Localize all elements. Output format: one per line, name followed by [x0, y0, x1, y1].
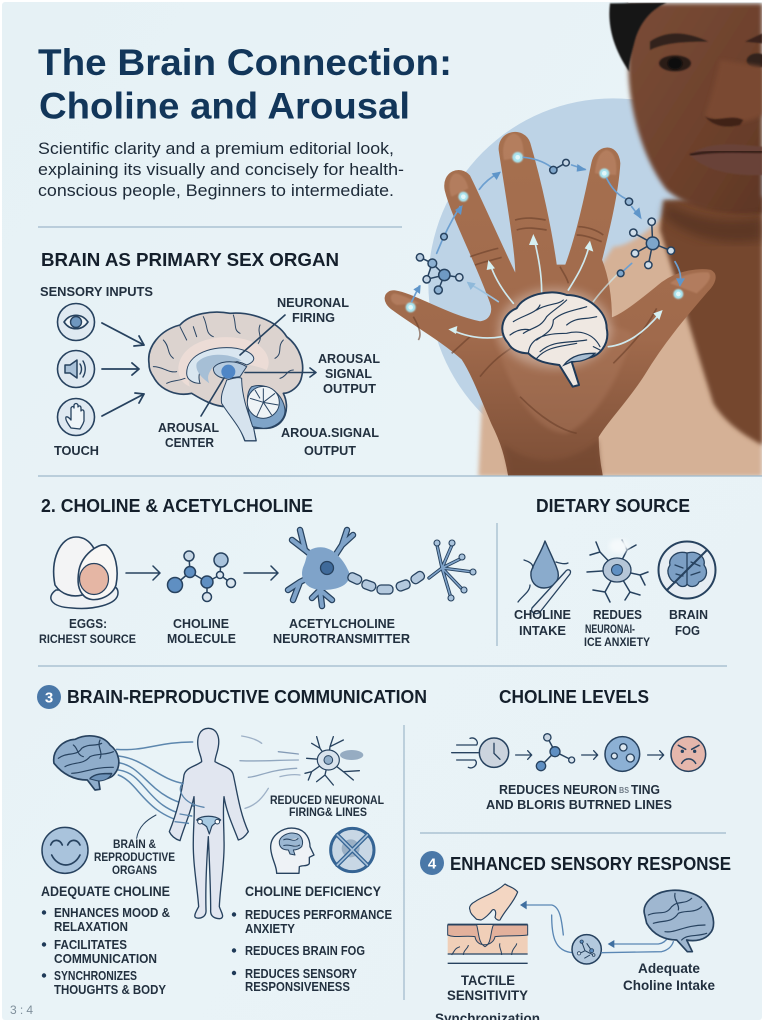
adequate choline column: ENHANCES MOOD & [54, 906, 170, 920]
body, brain and nerve diagram [42, 728, 374, 919]
icon: frown face [671, 737, 706, 771]
process flow icons [452, 734, 706, 771]
heading: BRAIN AS PRIMARY SEX ORGAN [41, 249, 339, 270]
icon: neuron [288, 530, 476, 606]
label: brain fog [669, 608, 708, 638]
arrow [582, 751, 598, 759]
label: reduced firing: FIRING& LINES [289, 805, 367, 819]
heading: CHOLINE LEVELS [499, 686, 649, 707]
heading: BRAIN-REPRODUCTIVE COMMUNICATION [67, 686, 427, 707]
caption: TING [631, 783, 660, 797]
label: brain and reproductive organs: BRAIN & [113, 839, 156, 851]
adequate choline column: ADEQUATE CHOLINE [41, 884, 170, 899]
choline deficiency column: CHOLINE DEFICIENCY [245, 884, 381, 899]
label: brain and reproductive organs: REPRODUCTIVE [94, 852, 175, 864]
panel: choline and acetylcholine [39, 495, 476, 646]
nerve overlay [175, 783, 204, 823]
label: reduced firing [270, 793, 384, 819]
side brain [54, 736, 119, 790]
brain to molecule arrows [602, 937, 673, 953]
adequate choline column: COMMUNICATION [54, 952, 157, 966]
intro text: conscious people, Beginners to intermediate. [38, 182, 394, 200]
icon: skin layers [448, 924, 528, 963]
arrow [648, 751, 664, 759]
wrist shade [503, 440, 602, 475]
neurotransmitter label: NEUROTRANSMITTER [273, 632, 410, 646]
molecular arc across fingertips [412, 157, 685, 302]
adequate choline column: SYNCHRONIZES [54, 969, 137, 983]
caption: REDUCES NEURON [499, 783, 617, 797]
adequate choline column: THOUGHTS & BODY [54, 983, 167, 997]
intro text [38, 140, 404, 200]
lower output label: AROUA.SIGNAL [281, 426, 379, 440]
arousal signal output label: OUTPUT [323, 382, 376, 396]
caption: BS [619, 786, 630, 795]
molecule label: CHOLINE [173, 617, 229, 631]
neuronal firing label [277, 296, 349, 325]
icon: molecule [536, 734, 575, 771]
panel: brain-reproductive communication [37, 685, 427, 997]
glowing fingertip points [406, 152, 683, 312]
badge 3 [37, 685, 61, 709]
label: reduces anxiety: NEURONAI- [585, 624, 635, 636]
icon: speaker [58, 350, 94, 388]
neural pathways from palm [452, 238, 660, 347]
sensory inputs label: SENSORY INPUTS [40, 284, 153, 299]
heading: ENHANCED SENSORY RESPONSE [450, 853, 731, 874]
hero photo: woman with hand and brain [387, 0, 764, 477]
label: adequate choline intake: Adequate [638, 960, 700, 976]
touch label: TOUCH [54, 443, 99, 458]
icon: side brain [644, 890, 714, 952]
label: tactile sensitivity: TACTILE [461, 973, 515, 988]
arrow: molecule to neuron [244, 566, 278, 580]
arousal center pointer [201, 378, 224, 416]
arrow [516, 751, 532, 759]
neuronal firing label: FIRING [292, 311, 335, 325]
icon: neuron fading [587, 539, 648, 602]
arousal signal output label: AROUSAL [318, 352, 380, 366]
adequate choline column: FACILITATES [54, 938, 127, 952]
molecule label: MOLECULE [167, 632, 236, 646]
arousal output arrow [245, 368, 316, 377]
pale circle behind hand [428, 98, 762, 414]
reproductive organs [197, 816, 221, 834]
glow around palm brain [498, 288, 612, 368]
choline deficiency column [232, 884, 392, 994]
icon: eggs [51, 537, 118, 608]
label: choline intake: CHOLINE [514, 608, 571, 622]
palm brain [502, 292, 607, 387]
neuronal firing pointer [240, 315, 285, 355]
eggs label: EGGS: [69, 617, 107, 631]
arousal center label [158, 421, 219, 450]
arousal center label: AROUSAL [158, 421, 219, 435]
right neuron [305, 737, 363, 785]
lower output label: OUTPUT [304, 444, 356, 458]
fading signal lines [240, 736, 300, 808]
body silhouette [169, 728, 248, 919]
label: reduces anxiety [584, 608, 650, 649]
choline deficiency column: ANXIETY [245, 922, 296, 936]
arrows into brain [102, 323, 144, 416]
molecule circle [572, 935, 601, 964]
title: The Brain Connection: [38, 42, 452, 83]
label: reduces anxiety: REDUES [593, 608, 642, 622]
label: brain and reproductive organs: ORGANS [112, 865, 157, 877]
choline deficiency column: RESPONSIVENESS [245, 980, 350, 994]
badge 4 [420, 851, 444, 875]
neuronal firing label: NEURONAL [277, 296, 349, 310]
icon: choline molecule [168, 551, 236, 602]
choline deficiency column: REDUCES SENSORY [245, 967, 358, 981]
molecule label [167, 617, 236, 646]
caption: AND BLORIS BUTRNED LINES [486, 798, 672, 812]
label: brain and reproductive organs [94, 839, 175, 877]
panel: dietary source [514, 495, 716, 649]
panel: choline levels [452, 686, 706, 812]
neurotransmitter label [273, 617, 410, 646]
heading: 2. CHOLINE & ACETYLCHOLINE [41, 495, 313, 516]
badge 4: 4 [428, 856, 437, 872]
panel: enhanced sensory response [420, 851, 731, 1024]
hand [387, 133, 714, 475]
arousal signal output label [318, 352, 380, 396]
label: reduces anxiety: ICE ANXIETY [584, 637, 650, 649]
heading: DIETARY SOURCE [536, 495, 690, 516]
panel: brain as primary sex organ [40, 249, 380, 458]
choline deficiency column: REDUCES PERFORMANCE [245, 908, 392, 922]
icon: cell cluster [605, 737, 640, 771]
icon: brain fog crossed [658, 542, 716, 598]
label: tactile sensitivity [447, 976, 528, 1000]
brain cross-section [149, 312, 303, 441]
aspect ratio note: 3:4 [10, 1003, 33, 1017]
eggs label: RICHEST SOURCE [39, 632, 136, 646]
title [38, 42, 452, 126]
lower output label [281, 426, 379, 458]
arrow: eggs to molecule [126, 566, 160, 580]
icon: hand touch [58, 398, 94, 436]
label: brain fog: BRAIN [669, 608, 708, 622]
badge 3: 3 [45, 690, 53, 706]
icon: choline intake [518, 541, 571, 614]
callout curve to reproductive organs label [137, 815, 156, 838]
arousal signal output label: SIGNAL [325, 367, 372, 381]
label: adequate choline intake [624, 963, 714, 990]
blurred woman [478, 0, 764, 477]
nerve lines [117, 742, 204, 823]
adequate choline column: RELAXATION [54, 920, 128, 934]
adequate choline column [41, 884, 170, 997]
arousal center label: CENTER [165, 436, 214, 450]
label: choline intake: INTAKE [519, 624, 566, 638]
neurotransmitter label: ACETYLCHOLINE [289, 617, 395, 631]
feedback arrows [523, 905, 573, 953]
title: Choline and Arousal [39, 86, 410, 126]
icon: eye [58, 304, 94, 340]
label: tactile sensitivity: SENSITIVITY [447, 988, 528, 1003]
label: choline intake [514, 608, 571, 638]
palm and finger tone [502, 340, 626, 433]
head with brain icon [271, 828, 314, 873]
sensory diagram [448, 884, 714, 964]
crossed circle icon [331, 828, 374, 872]
smiley icon [42, 827, 88, 873]
eggs label [39, 617, 136, 646]
label: brain fog: FOG [675, 624, 700, 638]
label: reduced firing: REDUCED NEURONAL [270, 793, 384, 807]
caption [486, 783, 672, 812]
label: adequate choline intake: Choline Intake [623, 977, 715, 993]
icon: hand touching [470, 884, 518, 920]
intro text: Scientific clarity and a premium editorial look, [38, 140, 394, 158]
intro text: explaining its visually and concisely for health- [38, 161, 404, 179]
choline deficiency column: REDUCES BRAIN FOG [245, 944, 365, 958]
icon: clock with speed lines [452, 738, 509, 768]
